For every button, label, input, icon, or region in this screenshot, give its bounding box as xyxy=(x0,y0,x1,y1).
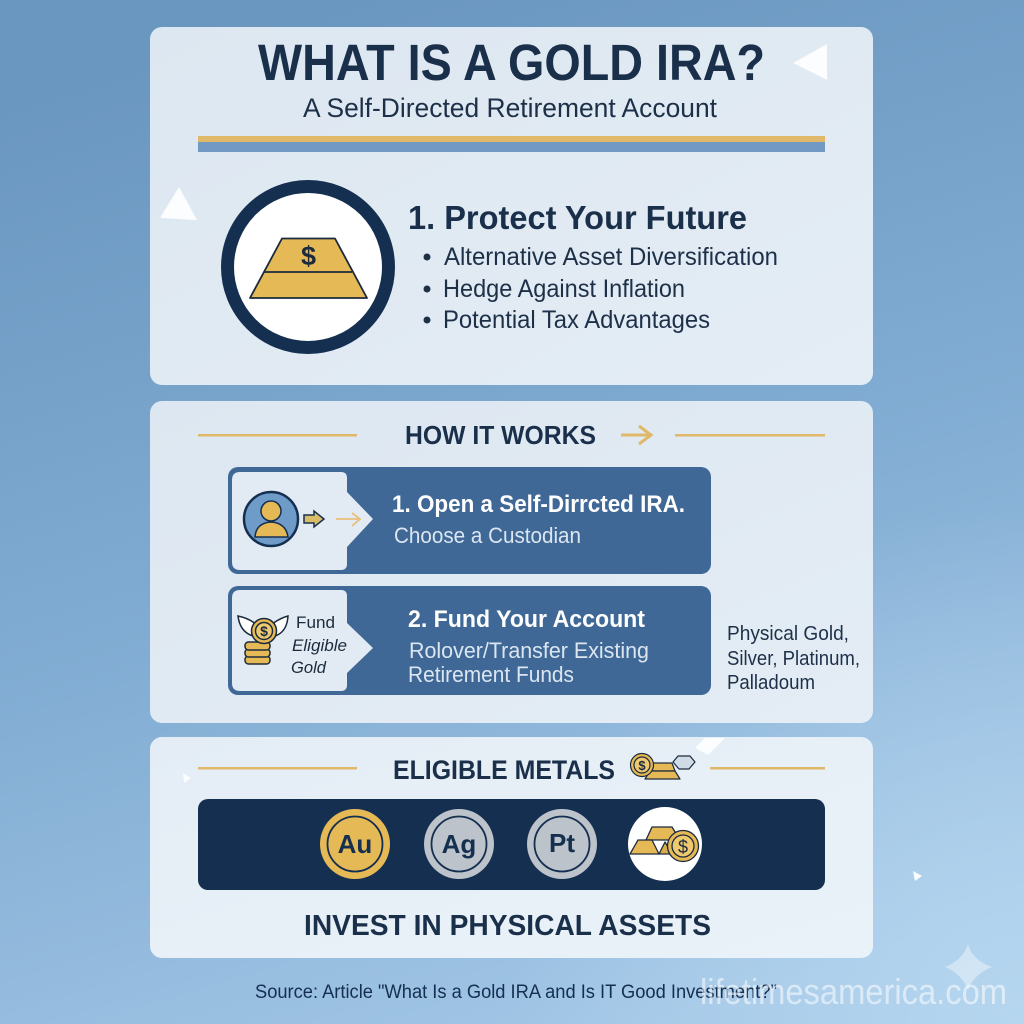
step 1 title: 1. Open a Self-Dirrcted IRA. xyxy=(392,491,685,518)
icon caption: fund eligible gold xyxy=(291,613,347,677)
decorative star xyxy=(945,944,992,990)
decorative sparks xyxy=(183,738,725,783)
title: WHAT IS A GOLD IRA? xyxy=(258,34,765,91)
icon: light arrow xyxy=(336,513,360,526)
icon: decorative triangle left xyxy=(160,187,197,220)
icon: gold bar in circle: $ xyxy=(301,241,316,271)
benefits list xyxy=(424,243,778,334)
icon: decorative triangle top right xyxy=(793,44,827,80)
platinum badge: Pt xyxy=(549,828,575,858)
gold badge: Au xyxy=(338,829,372,859)
step 2 description: Retirement Funds xyxy=(408,662,574,687)
panel: what is a gold IRA xyxy=(150,27,873,385)
icon: heading arrow xyxy=(621,426,651,444)
icon caption: fund eligible gold: Fund xyxy=(296,613,335,632)
icon caption: fund eligible gold: Gold xyxy=(291,658,327,677)
side note: physical metals xyxy=(727,623,860,694)
silver badge: Ag xyxy=(442,829,476,859)
benefits list: Potential Tax Advantages xyxy=(443,306,710,334)
step 2 card xyxy=(228,586,711,695)
platinum badge xyxy=(527,809,597,879)
icon: small arrow xyxy=(304,511,324,527)
silver badge xyxy=(424,809,494,879)
step 2 title: 2. Fund Your Account xyxy=(408,606,645,633)
title rule xyxy=(198,136,825,152)
side note: physical metals: Silver, Platinum, xyxy=(727,648,860,670)
icon: gold bars and coin xyxy=(628,807,702,881)
gold badge xyxy=(320,809,390,879)
step 2 description xyxy=(408,638,649,687)
benefits list: Hedge Against Inflation xyxy=(443,275,685,303)
subtitle: A Self-Directed Retirement Account xyxy=(303,93,717,123)
source note: Source: Article "What Is a Gold IRA and Is IT Good Investment?" xyxy=(255,982,777,1003)
icon: gold bar in circle xyxy=(228,186,388,348)
icon: gold bars and coin: $ xyxy=(678,837,688,857)
step 2 description: Rolover/Transfer Existing xyxy=(409,638,649,663)
icon: person xyxy=(244,492,298,546)
icon: coin, bar and nugget xyxy=(630,754,695,779)
decorative spark right xyxy=(913,871,922,881)
tagline: INVEST IN PHYSICAL ASSETS xyxy=(304,910,711,942)
panel: eligible metals xyxy=(150,737,873,958)
step 1 description: Choose a Custodian xyxy=(394,523,581,548)
panel: how it works xyxy=(150,401,873,723)
metals bar xyxy=(198,799,825,890)
benefits list: Alternative Asset Diversification xyxy=(444,243,778,271)
heading: how it works: HOW IT WORKS xyxy=(405,420,596,450)
icon: winged coin stack: $ xyxy=(260,623,268,639)
side note: physical metals: Palladoum xyxy=(727,672,815,694)
heading: protect your future: 1. Protect Your Future xyxy=(408,199,747,236)
icon: coin, bar and nugget: $ xyxy=(638,758,646,773)
heading: eligible metals: ELIGIBLE METALS xyxy=(393,755,615,785)
icon caption: fund eligible gold: Eligible xyxy=(292,636,347,655)
side note: physical metals: Physical Gold, xyxy=(727,623,849,645)
icon: winged coin stack xyxy=(238,616,288,664)
step 1 card xyxy=(228,467,711,574)
